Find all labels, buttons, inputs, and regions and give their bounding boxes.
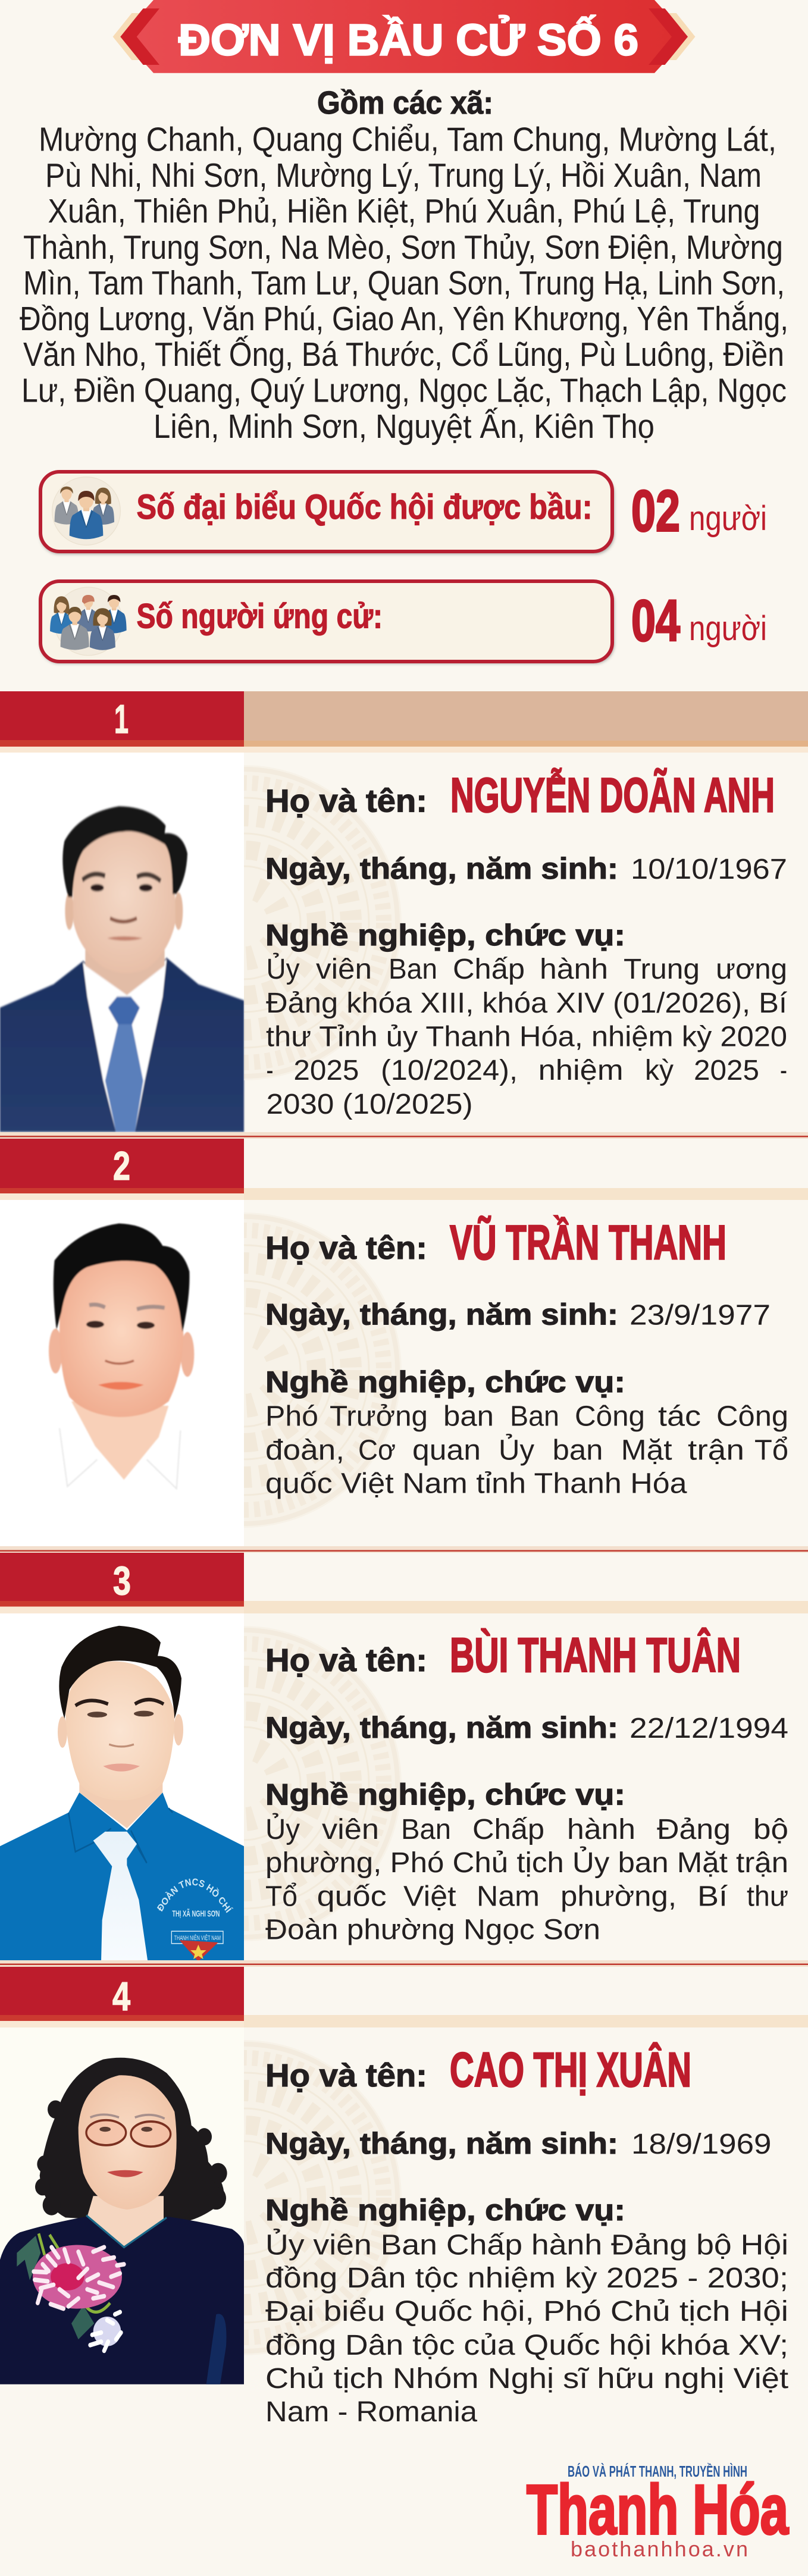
occupation [265, 1365, 788, 1500]
occupation: Trưởng [330, 1400, 428, 1432]
seal watermark [244, 2042, 400, 2354]
value: 02 [631, 478, 680, 544]
occupation: bộ [753, 1814, 788, 1845]
date of birth: Ngày, tháng, năm sinh: [265, 1711, 618, 1744]
occupation: Nam [477, 1881, 540, 1913]
panel: candidate 3 [0, 1546, 808, 1960]
occupation: - [780, 1055, 787, 1086]
occupation: - [267, 1055, 274, 1086]
occupation: thư [747, 1881, 788, 1913]
number bar 3 [0, 1553, 808, 1613]
photo: Bùi Thanh Tuân: ĐOÀN TNCS HỒ CHÍ MINH [157, 1879, 233, 1913]
occupation: nhiệm [538, 1055, 624, 1086]
occupation [265, 2193, 788, 2428]
occupation: viên [316, 954, 372, 985]
icon: three delegates [52, 477, 120, 545]
occupation: Việt [403, 1881, 456, 1913]
date of birth [265, 1711, 788, 1744]
occupation: Chấp [453, 954, 525, 985]
panel: candidate 4 [0, 1960, 808, 2428]
occupation: Đảng [657, 1814, 731, 1845]
occupation: đoàn, [265, 1435, 345, 1466]
name label: Họ và tên: [265, 1643, 427, 1678]
occupation: Đại biểu Quốc hội, Phó Chủ tịch Hội [265, 2296, 788, 2327]
occupation: phường, Phó Chủ tịch Ủy ban Mặt trận [265, 1846, 788, 1879]
occupation: Đoàn phường Ngọc Sơn [265, 1914, 600, 1946]
occupation: quốc [317, 1881, 387, 1913]
icon: five candidates [50, 587, 127, 656]
date of birth: 10/10/1967 [631, 854, 787, 885]
occupation: hành [540, 954, 608, 985]
occupation: Chủ tịch Nhóm Nghị sĩ hữu nghị Việt [265, 2363, 788, 2395]
date of birth [265, 2127, 771, 2160]
occupation: Bí [697, 1881, 728, 1913]
photo: Bùi Thanh Tuân: THỊ XÃ NGHI SƠN [172, 1908, 220, 1919]
date of birth: 22/12/1994 [630, 1713, 788, 1744]
occupation: Ban [389, 954, 437, 985]
occupation: Mặt [621, 1435, 672, 1466]
subheading: Gồm các xã: [317, 85, 493, 121]
photo: Cao Thị Xuân [0, 2027, 244, 2384]
panel: candidate 2 [0, 1132, 808, 1546]
occupation: quan [412, 1435, 481, 1466]
occupation: Ủy [267, 952, 300, 985]
occupation: Tổ [265, 1881, 297, 1913]
occupation: thư Tỉnh ủy Thanh Hóa, nhiệm kỳ 2020 [266, 1021, 787, 1052]
occupation: Đảng khóa XIII, khóa XIV (01/2026), Bí [266, 988, 788, 1019]
number bar 2: 2 [113, 1143, 130, 1189]
occupation: Phó [265, 1400, 318, 1432]
label: Số đại biểu Quốc hội được bầu: [137, 488, 593, 527]
panel: number of candidates [40, 581, 767, 663]
name label: Họ và tên: [265, 1230, 427, 1266]
seal watermark [244, 1628, 400, 1939]
number bar 3: 3 [113, 1558, 131, 1603]
occupation: kỳ [645, 1055, 674, 1086]
unit: người [689, 609, 767, 648]
occupation: 2030 (10/2025) [267, 1089, 472, 1120]
occupation: (10/2024), [381, 1055, 518, 1086]
occupation [265, 919, 788, 1120]
number bar 1: 1 [114, 697, 129, 742]
number bar 4 [0, 1967, 808, 2027]
date of birth [265, 852, 787, 885]
value: 04 [631, 588, 680, 653]
name label: Họ và tên: [265, 2058, 427, 2094]
seal watermark [244, 1214, 400, 1526]
date of birth: Ngày, tháng, năm sinh: [265, 852, 618, 885]
occupation: Ủy viên Ban Chấp hành Đảng bộ Hội [265, 2229, 788, 2261]
occupation: Trung [624, 954, 700, 985]
label: Số người ứng cử: [137, 597, 383, 635]
occupation: viên [322, 1814, 379, 1845]
occupation: Nam - Romania [265, 2396, 477, 2428]
candidate name: CAO THỊ XUÂN [450, 2043, 691, 2097]
occupation: Tổ [754, 1435, 788, 1466]
date of birth [265, 1298, 771, 1331]
text block: list of communes: Liên, Minh Sơn, Nguyệt Ấn, Kiên Thọ [154, 407, 654, 446]
occupation: ương [716, 954, 787, 985]
occupation: Công [575, 1400, 645, 1432]
occupation: Công [716, 1400, 788, 1432]
date of birth: 23/9/1977 [630, 1299, 771, 1331]
logo: Thanh Hóa newspaper: baothanhhoa.vn [571, 2537, 748, 2561]
occupation: Ủy [499, 1434, 534, 1466]
occupation: 2025 [694, 1055, 759, 1086]
banner: title: ĐƠN VỊ BẦU CỬ SỐ 6 [178, 15, 638, 64]
occupation: Nghề nghiệp, chức vụ: [265, 1778, 625, 1812]
occupation: 2025 [293, 1055, 359, 1086]
occupation: phường, [560, 1881, 677, 1913]
occupation: hành [567, 1814, 635, 1845]
number bar 1 [0, 691, 808, 753]
occupation: Nghề nghiệp, chức vụ: [265, 2193, 625, 2227]
number bar 4: 4 [112, 1974, 130, 2019]
unit: người [689, 499, 767, 538]
photo: Bùi Thanh Tuân: THANH NIÊN VIỆT NAM [174, 1934, 221, 1942]
photo: Vũ Trần Thanh [0, 1200, 244, 1546]
occupation: Chấp [472, 1814, 544, 1845]
panel: candidate 1 [0, 691, 808, 1132]
date of birth: Ngày, tháng, năm sinh: [265, 2127, 618, 2160]
occupation [265, 1778, 788, 1946]
occupation: Nghề nghiệp, chức vụ: [265, 1365, 625, 1399]
seal watermark [244, 767, 400, 1080]
date of birth: 18/9/1969 [631, 2129, 771, 2160]
occupation: ban [443, 1400, 494, 1432]
name label: Họ và tên: [265, 783, 427, 819]
date of birth: Ngày, tháng, năm sinh: [265, 1298, 618, 1331]
occupation: quốc Việt Nam tỉnh Thanh Hóa [265, 1468, 687, 1500]
occupation: Cơ [358, 1435, 396, 1466]
number bar 2 [0, 1139, 808, 1200]
occupation: Nghề nghiệp, chức vụ: [265, 919, 625, 952]
banner: title [113, 0, 696, 73]
occupation: Ban [510, 1400, 559, 1432]
occupation: trận [688, 1435, 744, 1466]
panel: number of deputies [40, 472, 767, 554]
occupation: Ban [401, 1814, 451, 1845]
occupation: đồng Dân tộc của Quốc hội khóa XV; [265, 2330, 788, 2361]
occupation: tác [658, 1400, 701, 1432]
occupation: ban [552, 1435, 603, 1466]
text block: list of communes [20, 85, 788, 446]
photo: Nguyễn Doãn Anh [0, 753, 244, 1132]
occupation: đồng Dân tộc nhiệm kỳ 2025 - 2030; [265, 2262, 788, 2294]
occupation: Ủy [265, 1813, 300, 1845]
